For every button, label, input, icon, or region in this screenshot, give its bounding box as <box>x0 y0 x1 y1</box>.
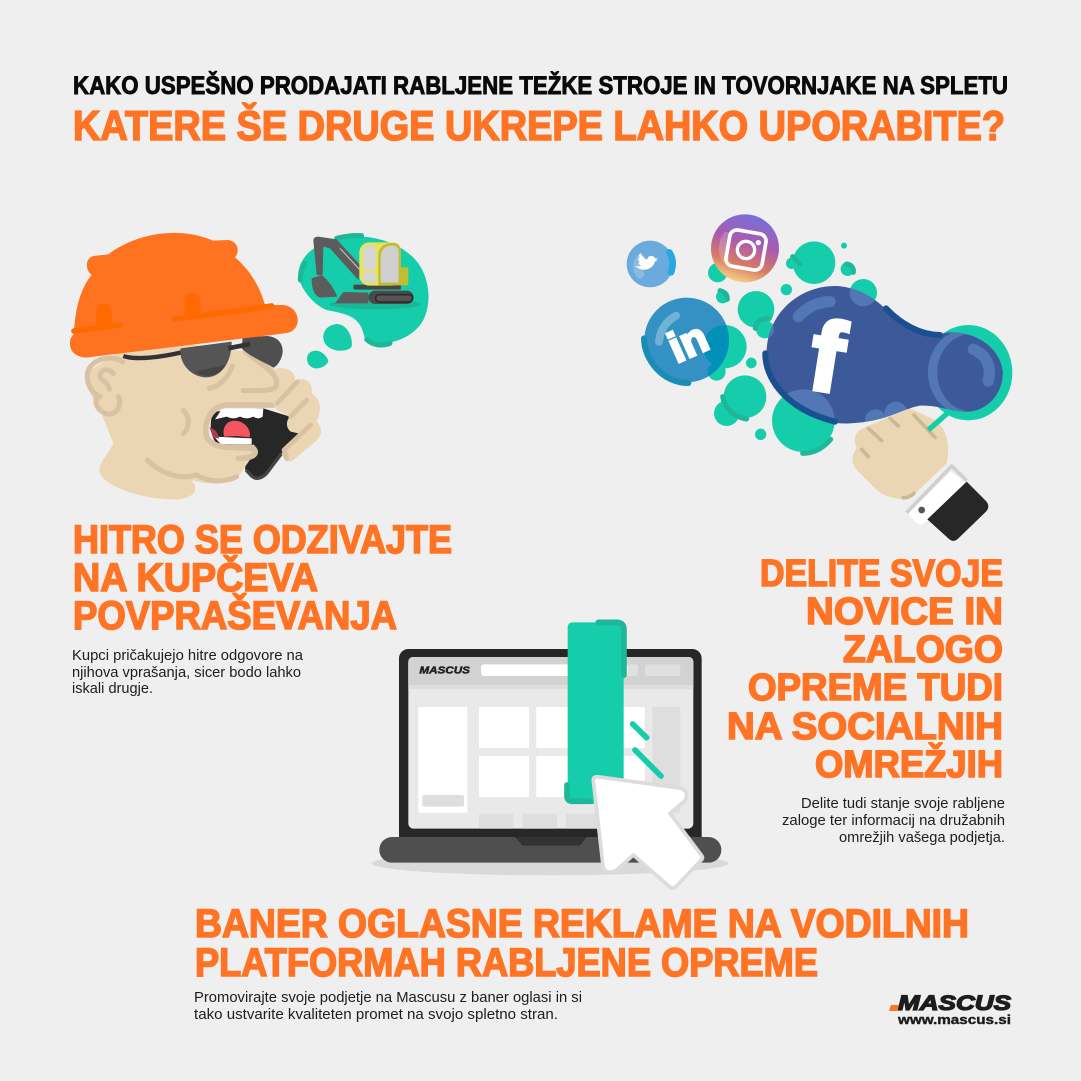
heading: respond quickly: NA KUPČEVA <box>73 554 318 600</box>
text: share on social: omrežjih vašega podjetja. <box>839 830 1005 846</box>
icon: cursor arrow <box>593 777 702 888</box>
icon: linkedin <box>641 298 729 386</box>
hand holding phone <box>272 368 321 461</box>
icon: hand holding balloon <box>852 408 948 499</box>
icon: instagram <box>711 214 779 282</box>
logo: mascus: MASCUS <box>898 991 1012 1015</box>
laptop screen: MASCUS <box>419 666 470 677</box>
icon: linkedin: in <box>661 313 715 372</box>
title <box>73 70 1008 149</box>
face <box>85 343 280 499</box>
text: respond quickly: njihova vprašanja, sicer bodo lahko <box>72 665 301 681</box>
text: respond quickly <box>72 648 303 697</box>
icon: facebook balloon <box>762 286 1003 425</box>
icon: shirt cuff and sleeve <box>907 466 988 541</box>
heading: share on social: NA SOCIALNIH <box>727 706 1003 748</box>
illustration: laptop with banner <box>372 622 728 888</box>
title: KATERE ŠE DRUGE UKREPE LAHKO UPORABITE? <box>73 101 1005 149</box>
heading: share on social: DELITE SVOJE <box>760 553 1003 595</box>
banner ad <box>567 622 624 804</box>
text: banner ads <box>194 990 582 1023</box>
heading: banner ads: BANER OGLASNE REKLAME NA VODILNIH <box>195 902 969 946</box>
icon: phone <box>245 408 298 478</box>
laptop screen <box>408 657 693 829</box>
text: respond quickly: iskali drugje. <box>72 681 153 697</box>
text: respond quickly: Kupci pričakujejo hitre odgovore na <box>72 648 303 664</box>
click marks <box>633 724 661 776</box>
icon: balloon handle <box>928 412 949 430</box>
heading: banner ads <box>195 902 969 985</box>
heading: respond quickly: HITRO SE ODZIVAJTE <box>73 518 452 562</box>
heading: share on social <box>727 553 1003 786</box>
heading: share on social: OMREŽJIH <box>815 742 1003 786</box>
text: banner ads: Promovirajte svoje podjetje na Mascusu z baner oglasi in si <box>194 990 582 1006</box>
icon: balloon ring <box>924 325 1012 420</box>
heading: respond quickly <box>73 518 452 638</box>
text: banner ads: tako ustvarite kvaliteten promet na svojo spletno stran. <box>194 1007 558 1023</box>
heading: share on social: OPREME TUDI <box>748 667 1003 709</box>
illustration: social media balloon <box>627 214 1012 541</box>
text: share on social <box>782 796 1005 846</box>
sunglasses <box>123 336 283 377</box>
heading: respond quickly: POVPRAŠEVANJA <box>73 592 397 638</box>
laptop base <box>379 837 721 863</box>
hard hat <box>70 233 298 358</box>
logo: mascus <box>889 991 1012 1027</box>
icon: facebook balloon: f <box>802 300 853 415</box>
text: share on social: zaloge ter informacij na družabnih <box>782 813 1005 829</box>
illustration: worker on phone <box>70 233 429 499</box>
heading: share on social: ZALOGO <box>843 629 1003 671</box>
mouth <box>206 405 273 458</box>
heading: share on social: NOVICE IN <box>806 591 1003 633</box>
icon: twitter <box>627 241 673 287</box>
thought bubble with excavator <box>298 236 429 368</box>
teal bubbles <box>703 241 877 452</box>
face lines <box>87 351 277 481</box>
logo: mascus: www.mascus.si <box>897 1013 1011 1027</box>
text: share on social: Delite tudi stanje svoje rabljene <box>801 796 1005 812</box>
heading: banner ads: PLATFORMAH RABLJENE OPREME <box>195 941 818 985</box>
laptop body <box>399 649 702 846</box>
